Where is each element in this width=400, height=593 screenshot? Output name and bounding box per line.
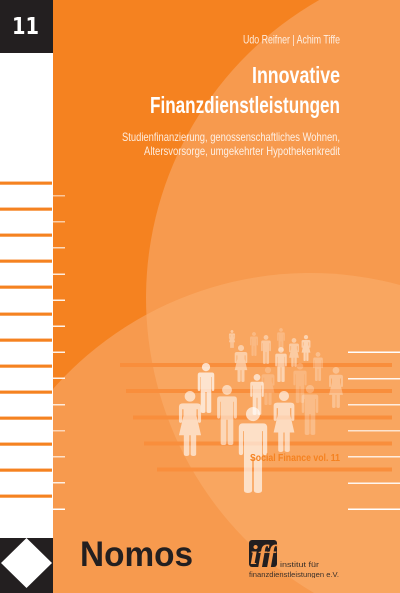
icon: faint woman 1 (262, 367, 274, 405)
institute name: finanzdienstleistungen e.V. (249, 570, 339, 579)
icon: far man 1 (250, 332, 258, 356)
subtitle: Studienfinanzierung, genossenschaftliches Wohnen, (122, 130, 340, 144)
icon: mid man 1 (313, 352, 323, 381)
volume number badge: 11 (12, 14, 39, 40)
white spine (0, 53, 53, 538)
icon: iff square: iff (250, 540, 279, 570)
series label: Social Finance vol. 11 (250, 452, 340, 464)
icon: man upper left (198, 363, 214, 413)
institute name (249, 562, 338, 578)
left white ticks (53, 195, 65, 510)
icon: mid woman 1 (235, 345, 247, 382)
right white ticks (348, 352, 400, 510)
iff institute logo (249, 540, 339, 579)
subtitle: Altersvorsorge, umgekehrter Hypothekenkredit (144, 144, 341, 158)
institute name: institut für (280, 560, 320, 569)
icon: front man (239, 407, 267, 493)
icon: faint man 2 (302, 385, 318, 435)
icon: faint man 1 (293, 363, 307, 403)
icon: far woman 2 (289, 338, 299, 367)
horizontal orange stripes (120, 363, 392, 472)
icon: far man 2 (277, 328, 285, 351)
icon: man centre (250, 374, 264, 415)
publisher diamond badge (0, 538, 53, 593)
icon: woman right (274, 391, 294, 452)
title: Innovative (252, 62, 340, 88)
authors: Udo Reifner | Achim Tiffe (243, 32, 340, 46)
publisher name: Nomos (80, 535, 193, 574)
icon: mid man 2 (275, 347, 287, 382)
icon: woman left (179, 391, 201, 456)
title: Finanzdienstleistungen (150, 92, 340, 118)
volume number badge (0, 0, 53, 53)
icon: man left (217, 385, 237, 445)
icon: faint woman 2 (329, 367, 343, 408)
icon: far man 3 (261, 335, 271, 364)
spine orange bars (0, 181, 52, 498)
title (150, 62, 340, 118)
subtitle (122, 130, 341, 158)
icon: far woman 1 (229, 330, 235, 348)
icon: far woman 3 (302, 335, 310, 361)
crowd of people icons (179, 328, 343, 493)
